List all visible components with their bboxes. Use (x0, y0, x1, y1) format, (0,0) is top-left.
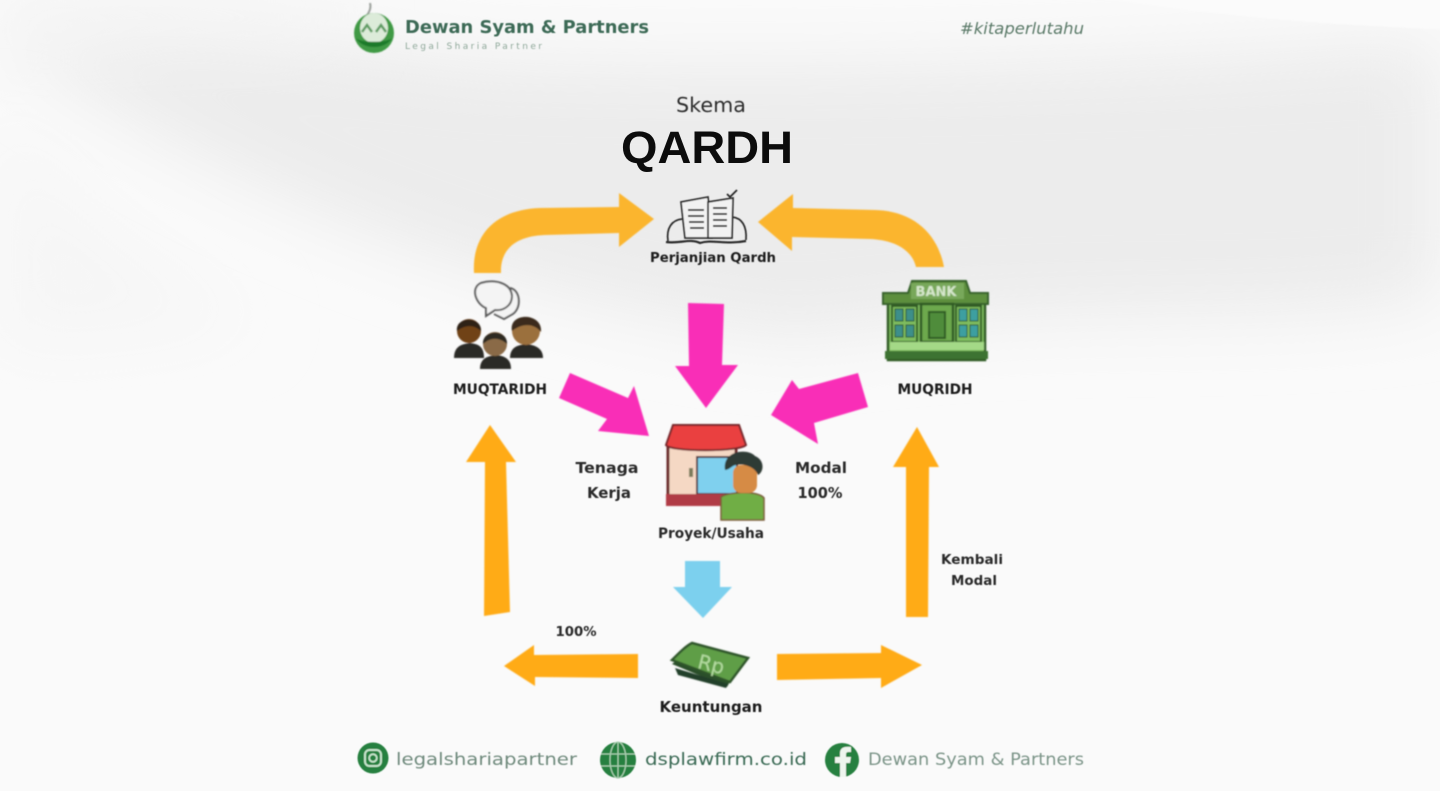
arrow: orange right up (893, 427, 939, 617)
icon: instagram (358, 742, 388, 774)
arrow: pink left (559, 373, 649, 436)
person left (454, 343, 484, 358)
label: Tenaga Kerja (576, 459, 638, 502)
arrow: orange left up (466, 425, 516, 616)
icon: logo emblem (354, 3, 394, 53)
label: Modal 100%: 100% (798, 484, 843, 502)
title: Skema: Skema (676, 93, 746, 117)
label: Kembali Modal (941, 552, 1003, 589)
arrow: muqtaridh to perjanjian (474, 193, 654, 273)
person middle (480, 355, 511, 369)
icon: muqtaridh people (454, 282, 543, 369)
label: Tenaga Kerja: Kerja (587, 484, 631, 502)
facebook page name: Dewan Syam & Partners (868, 750, 1084, 770)
label: Modal 100% (795, 459, 847, 502)
footer: facebook (825, 743, 1084, 777)
icon: facebook (825, 743, 859, 777)
label: MUQRIDH: MUQRIDH (898, 382, 972, 398)
footer: instagram (358, 742, 577, 774)
label: Perjanjian Qardh: Perjanjian Qardh (650, 250, 776, 266)
arrow: orange bottom right (777, 645, 922, 688)
arrow: orange bottom left (504, 645, 638, 686)
Rp mark: Rp (695, 649, 727, 679)
label: Kembali Modal: Kembali (941, 552, 1003, 568)
arrow: pink top (675, 303, 738, 408)
logo: Dewan Syam & Partners (354, 3, 649, 53)
icon: money Rp (672, 643, 748, 688)
instagram handle: legalshariapartner (396, 750, 577, 770)
arrow: muqridh to perjanjian (758, 194, 944, 267)
speech bubbles (494, 288, 519, 319)
title: QARDH: QARDH (621, 122, 793, 173)
arrow: pink right (771, 373, 868, 444)
website address: dsplawfirm.co.id (645, 750, 807, 770)
footer: website (600, 742, 807, 778)
tagline: Legal Sharia Partner (405, 42, 542, 52)
person right (510, 344, 543, 358)
label: Tenaga Kerja: Tenaga (576, 459, 638, 477)
icon: globe (600, 742, 636, 778)
icon: shop with owner (666, 425, 764, 520)
hashtag: #kitaperlutahu (960, 19, 1084, 38)
label: Kembali Modal: Modal (951, 573, 997, 589)
icon: agreement documents (666, 190, 746, 243)
brand name: Dewan Syam & Partners (405, 17, 649, 38)
bank sign: BANK (916, 285, 957, 300)
label: Proyek/Usaha: Proyek/Usaha (658, 526, 764, 542)
label: Keuntungan: Keuntungan (660, 698, 762, 716)
label: Modal 100%: Modal (795, 459, 847, 477)
label: MUQTARIDH: MUQTARIDH (453, 382, 547, 398)
label: 100%: 100% (556, 624, 597, 640)
icon: bank (883, 281, 988, 360)
arrow: blue down (673, 561, 732, 618)
